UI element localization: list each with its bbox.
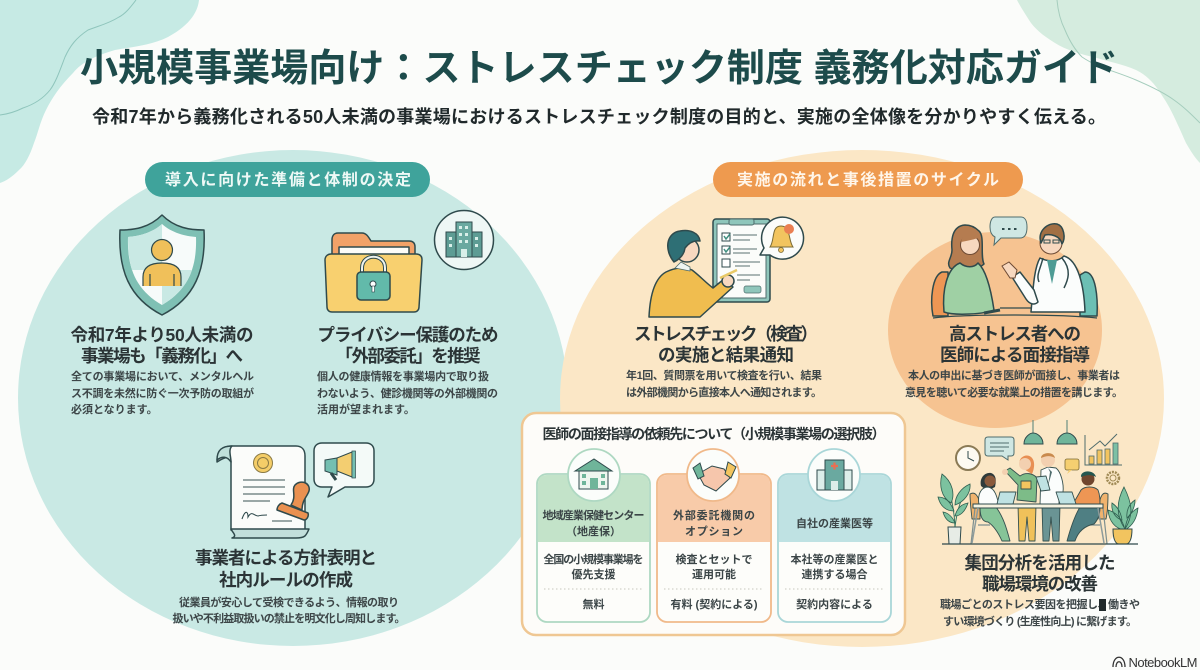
- chat bubble: [985, 437, 1014, 460]
- card: company physician: 連携する場合: [802, 567, 868, 581]
- text block: outsourcing: 「外部委託」を推奨: [336, 346, 481, 366]
- text block: outsourcing: プライバシー保護のため: [318, 325, 498, 345]
- background blob: teal top-left: [0, 0, 199, 183]
- small yellow bubble: [1065, 459, 1079, 474]
- rising bar chart: [1085, 434, 1122, 465]
- text block: outsourcing: [317, 325, 498, 416]
- card: company physician: 本社等の産業医と: [790, 552, 878, 566]
- text block: policy statement: 社内ルールの作成: [219, 570, 353, 590]
- text block: stress check: ストレスチェック（検査）: [634, 324, 818, 344]
- text block: mandatory: 事業場も「義務化」へ: [81, 346, 243, 366]
- person standing with folder: [1002, 455, 1037, 541]
- person seated left: [970, 473, 1010, 544]
- text block: doctor interview: [905, 324, 1123, 399]
- text block: mandatory: 必須となります。: [71, 402, 158, 416]
- text block: doctor interview: 高ストレス者への: [949, 324, 1081, 344]
- panel: consultation options: [522, 413, 905, 635]
- text block: group analysis: [940, 553, 1140, 628]
- text block: doctor interview: 医師による面接指導: [940, 345, 1090, 365]
- right plant: [1108, 487, 1138, 544]
- text block: mandatory: 全ての事業場において、メンタルヘル: [71, 369, 254, 383]
- card: regional centre: 優先支援: [572, 567, 616, 581]
- card: external agency: [657, 449, 771, 622]
- text block: mandatory: 令和7年より50人未満の: [70, 325, 254, 345]
- pendant lamps: [1024, 420, 1077, 444]
- panel heading: 医師の面接指導の依頼先について（小規模事業場の選択肢）: [542, 426, 886, 442]
- pill heading: preparation: [145, 162, 430, 197]
- text block: stress check: の実施と結果通知: [658, 345, 794, 365]
- card: company physician: 自社の産業医等: [796, 516, 873, 530]
- card: external agency: 検査とセットで: [676, 552, 752, 566]
- card: regional centre: 全国の小規模事業場を: [544, 552, 644, 566]
- text block: policy statement: [172, 548, 406, 625]
- person standing with tablet: [1036, 453, 1063, 541]
- text block: stress check: 年1回、質問票を用いて検査を行い、結果: [626, 368, 822, 382]
- text block: stress check: [626, 324, 822, 399]
- card: external agency: オプション: [685, 525, 743, 538]
- subtitle: 令和7年から義務化される50人未満の事業場におけるストレスチェック制度の目的と、実施の全体像を分かりやすく伝える。: [92, 106, 1106, 127]
- clock: [956, 446, 980, 470]
- text block: mandatory: ス不調を未然に防ぐ一次予防の取組が: [71, 386, 254, 400]
- card: regional centre: （地産保）: [566, 524, 621, 538]
- card: regional centre: 地域産業保健センター: [542, 508, 644, 522]
- card: external agency: 外部委託機関の: [673, 508, 755, 522]
- card: regional centre: [537, 449, 650, 622]
- pill heading: preparation: 導入に向けた準備と体制の決定: [165, 170, 411, 189]
- panel: preparation circle: [18, 150, 568, 646]
- panel: implementation cycle circle: [522, 150, 1164, 647]
- card: regional centre: 無料: [582, 597, 604, 611]
- background blob: green top-right: [1017, 0, 1200, 163]
- icon: megaphone speech bubble: [314, 443, 374, 497]
- left plant: [938, 474, 970, 544]
- text block: mandatory: [70, 325, 254, 416]
- highlight circle behind doctor: [888, 232, 1102, 428]
- text block: group analysis: すい環境づくり (生産性向上) に繋げます。: [943, 614, 1137, 628]
- text block: outsourcing: 個人の健康情報を事業場内で取り扱: [317, 369, 489, 383]
- card: company physician: 契約内容による: [796, 597, 873, 611]
- text block: outsourcing: 活用が望まれます。: [317, 402, 415, 416]
- icon: locked folder: [325, 233, 422, 312]
- gear: [1107, 472, 1119, 484]
- icon: doctor consultation: [932, 217, 1097, 318]
- icon: office building in circle: [434, 210, 494, 270]
- text block: outsourcing: わないよう、健診機関等の外部機関の: [317, 386, 498, 400]
- icon: shield with person: [120, 215, 204, 315]
- card: external agency: 運用可能: [692, 567, 736, 581]
- icon: person with checklist and bell: [649, 217, 804, 317]
- icon: policy document with stamp: [217, 446, 309, 538]
- card: external agency: 有料 (契約による): [670, 597, 758, 611]
- icon: team meeting illustration: [938, 420, 1138, 544]
- person seated right: [1067, 471, 1108, 544]
- text block: doctor interview: 本人の申出に基づき医師が面接し、事業者は: [908, 368, 1120, 382]
- text block: doctor interview: 意見を聴いて必要な就業上の措置を講じます。: [905, 385, 1123, 399]
- pill heading: cycle: [713, 162, 1023, 197]
- text block: stress check: は外部機関から直接本人へ通知されます。: [626, 385, 822, 399]
- title: 小規模事業場向け：ストレスチェック制度 義務化対応ガイド: [80, 48, 1118, 90]
- text block: policy statement: 事業者による方針表明と: [195, 548, 377, 568]
- text block: policy statement: 扱いや不利益取扱いの禁止を明文化し周知します。: [172, 611, 406, 625]
- pill heading: cycle: 実施の流れと事後措置のサイクル: [737, 170, 999, 189]
- NotebookLM logo: NotebookLM: [1128, 655, 1198, 670]
- laptops: [997, 492, 1076, 504]
- text block: group analysis: 集団分析を活用した: [964, 553, 1116, 573]
- text block: policy statement: 従業員が安心して受検できるよう、情報の取り: [179, 595, 399, 609]
- text block: group analysis: 職場環境の改善: [982, 574, 1098, 594]
- text block: group analysis: 職場ごとのストレス要因を把握し、働きや: [940, 597, 1140, 611]
- table and floor: [942, 504, 1138, 544]
- card: company physician: [778, 449, 891, 622]
